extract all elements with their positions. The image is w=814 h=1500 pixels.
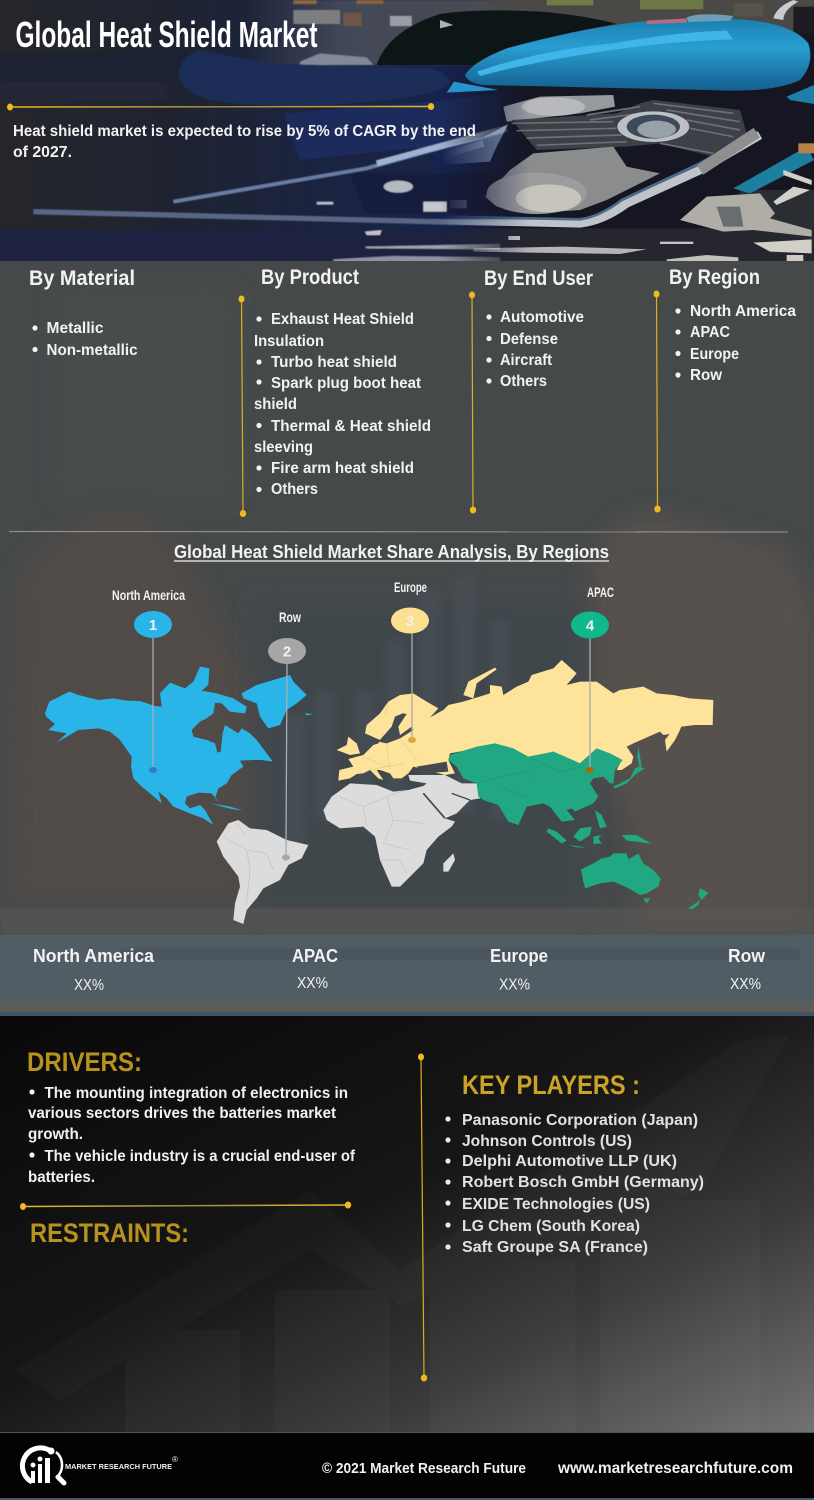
callout: pin 3 Europe [391, 579, 429, 743]
left navy scene, rear seat and pipes [0, 0, 577, 262]
region name: APAC: APAC [292, 946, 338, 966]
panel: Drivers: The vehicle industry is a crucial end-user of [44, 1148, 356, 1165]
region name: Europe: XX% [499, 976, 530, 994]
panel: By End User: Aircraft [500, 352, 553, 369]
region name: North America: North America [33, 946, 155, 966]
panel: By End User: Automotive [500, 309, 584, 326]
panel: By Product: Spark plug boot heat [271, 375, 422, 392]
callout: pin 2 Row: 2 [283, 644, 291, 660]
panel: Drivers [27, 1047, 356, 1186]
panel: By Region: By Region [669, 266, 760, 289]
panel: Key Players: Panasonic Corporation (Japan) [462, 1112, 698, 1129]
fuel tank and fender, unfaded [377, 10, 810, 93]
panel: Drivers: growth. [28, 1126, 83, 1143]
heading: Restraints: RESTRAINTS: [30, 1218, 189, 1248]
map: Asia Pacific [448, 743, 708, 909]
panel: footer: ® [172, 1455, 178, 1464]
icon: Market Research Future logo [22, 1448, 64, 1483]
callout: pin 2 Row [268, 609, 306, 860]
panel: regional share bar [0, 935, 814, 1016]
world map [45, 660, 713, 924]
panel: Key Players: LG Chem (South Korea) [462, 1218, 640, 1235]
panel: By Product [254, 266, 431, 498]
vertical gold divider [418, 1054, 427, 1382]
panel: Drivers: batteries. [28, 1169, 95, 1186]
panel: By Product: Thermal & Heat shield [271, 418, 431, 435]
region name: Europe [490, 946, 548, 994]
callout: pin 1 North America [112, 587, 185, 773]
panel: By End User: Defense [500, 331, 558, 348]
region name: APAC [292, 946, 338, 992]
panel: By Material: Non-metallic [46, 342, 138, 359]
map: Europe and Russia [337, 660, 713, 781]
panel: By Product: Insulation [254, 333, 324, 350]
panel: By Material [29, 267, 138, 359]
panel: Key Players: Robert Bosch GmbH (Germany) [462, 1174, 704, 1191]
panel: Drivers: DRIVERS: [27, 1047, 142, 1077]
panel: Key Players: KEY PLAYERS : [462, 1070, 640, 1100]
panel: By Material: Metallic [46, 320, 104, 337]
hero divider line [7, 103, 434, 110]
region name: Row: XX% [730, 976, 761, 993]
hero text: CAGR statement: of 2027. [13, 144, 72, 161]
region name: APAC: XX% [297, 975, 328, 992]
callout: pin 3 Europe: Europe [394, 579, 427, 595]
panel: Drivers: The mounting integration of electronics in [44, 1085, 348, 1102]
panel: By Product: Fire arm heat shield [271, 460, 414, 477]
panel: By Product: Others [271, 481, 318, 498]
panel: segmentation and map background [0, 261, 814, 936]
panel: Key Players [445, 1070, 704, 1256]
callout: pin 4 APAC: APAC [587, 584, 614, 600]
divider between drivers and restraints [20, 1202, 351, 1210]
panel: By Product: shield [254, 396, 297, 413]
map: Rest of World [217, 775, 480, 924]
region name: Europe: Europe [490, 946, 548, 966]
panel: footer: www.marketresearchfuture.com [557, 1460, 793, 1477]
panel: By End User [484, 267, 593, 390]
panel: By Region: APAC [690, 324, 730, 341]
panel: By Product: Turbo heat shield [271, 354, 397, 371]
panel: footer [0, 1432, 814, 1500]
panel: Drivers: various sectors drives the batteries market [28, 1105, 337, 1122]
right scene, engine and road, fades in from the navy tint [440, 0, 814, 262]
panel: By End User: By End User [484, 267, 593, 290]
region name: North America: XX% [74, 977, 104, 994]
gold column dividers [238, 290, 661, 517]
region name: Row: Row [728, 946, 766, 966]
panel: By End User: Others [500, 373, 547, 390]
panel: Key Players: Johnson Controls (US) [462, 1133, 632, 1150]
callout: pin 1 North America: 1 [149, 617, 157, 634]
panel: dark lower section background [0, 1016, 814, 1432]
panel: By Region: North America [690, 303, 796, 320]
panel: Key Players: Delphi Automotive LLP (UK) [462, 1153, 677, 1170]
panel: hero photo of motorcycle [0, 0, 814, 262]
map heading: Global Heat Shield Market Share Analysis, By Regions [174, 542, 609, 562]
panel: By Region: Row [690, 367, 723, 384]
panel: Key Players: EXIDE Technologies (US) [462, 1196, 650, 1213]
hero text: CAGR statement [13, 123, 476, 161]
callout: pin 1 North America: North America [112, 587, 185, 603]
panel: By Region [669, 266, 796, 384]
title: Global Heat Shield Market [16, 14, 318, 55]
callout: pin 2 Row: Row [279, 609, 301, 625]
map: North America [45, 667, 313, 825]
panel: By Product: Exhaust Heat Shield [271, 311, 414, 328]
panel: By Product: By Product [261, 266, 359, 289]
panel: By Product: sleeving [254, 439, 313, 456]
callout: pin 4 APAC [571, 584, 614, 773]
callout: pin 4 APAC: 4 [586, 618, 595, 634]
panel: footer: MARKET RESEARCH FUTURE [65, 1462, 172, 1471]
hero text: CAGR statement: Heat shield market is expected to rise by 5% of CAGR by the end [13, 123, 476, 140]
callout: pin 3 Europe: 3 [406, 613, 414, 630]
region name: Row [728, 946, 766, 993]
panel: footer: © 2021 Market Research Future [322, 1460, 526, 1477]
region name: North America [33, 946, 155, 994]
panel: Key Players: Saft Groupe SA (France) [462, 1239, 648, 1256]
panel: By Material: By Material [29, 267, 135, 290]
panel: By Region: Europe [690, 346, 739, 363]
